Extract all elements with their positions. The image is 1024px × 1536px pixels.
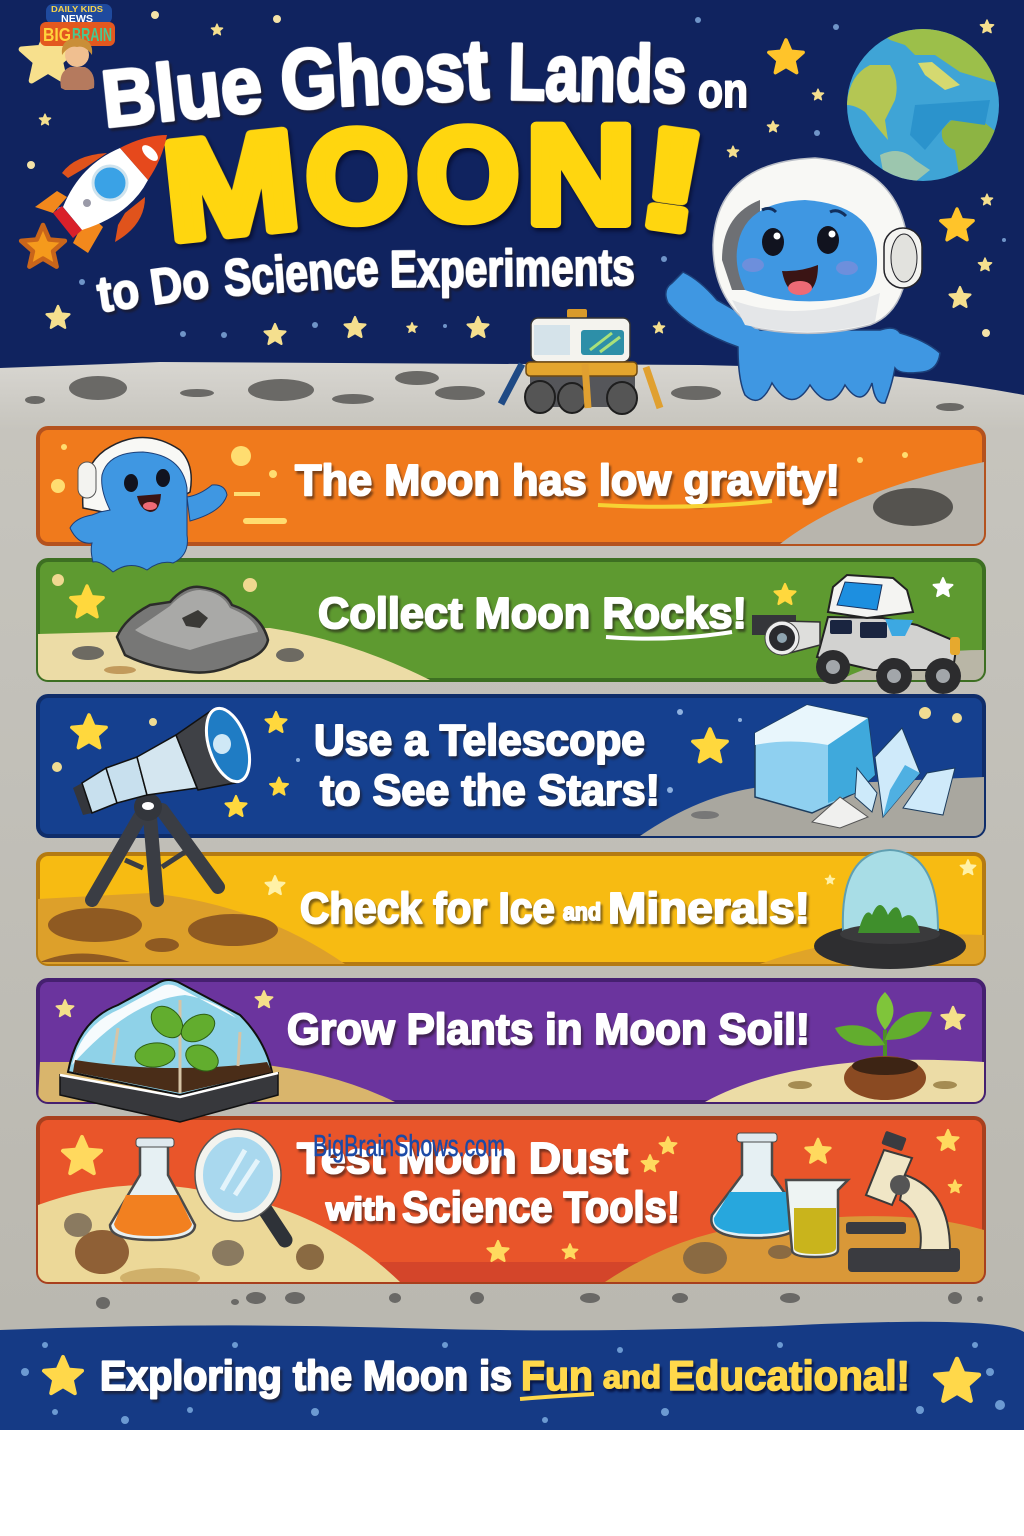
- title line 1: Lands: [508, 27, 687, 119]
- heading: moon dust line 2: with: [325, 1191, 396, 1227]
- moon ground: [0, 362, 1024, 1335]
- icon: mini ghost: [70, 438, 227, 572]
- icon: sprout in pot: [835, 992, 932, 1100]
- icon: glass dome with plants: [814, 850, 966, 969]
- icon: beaker: [786, 1180, 848, 1257]
- footer text: Educational!: [668, 1352, 910, 1399]
- title line 3: [94, 239, 635, 323]
- helmet: [713, 158, 908, 333]
- icon: ice block: [755, 705, 955, 828]
- icon: blue ghost astronaut: [666, 158, 940, 403]
- title line 2: MOON!: O: [417, 101, 519, 247]
- heading: ice and minerals: [300, 884, 810, 933]
- title line 2: MOON!: N: [526, 96, 636, 253]
- title line 2: MOON!: [156, 96, 716, 270]
- logo: Daily Kids News Big Brain: DAILY KIDS: [51, 5, 104, 14]
- underline: [598, 501, 772, 507]
- ghost body: [666, 272, 940, 403]
- icon: left star: [44, 1357, 82, 1393]
- logo: Daily Kids News Big Brain: BRAIN: [72, 25, 112, 45]
- heading: collect rocks: Collect Moon Rocks!: [318, 589, 747, 638]
- icon: right star: [935, 1359, 979, 1401]
- footer text: and: [603, 1359, 661, 1395]
- icon: blue flask: [711, 1133, 800, 1238]
- title line 3: Science: [222, 239, 380, 308]
- panel: grow plants: [38, 980, 984, 1102]
- footer text: Exploring the Moon is: [100, 1352, 512, 1399]
- icon: rocket: [21, 135, 167, 267]
- footer text: Fun: [521, 1352, 593, 1399]
- icon: microscope: [846, 1131, 960, 1272]
- title line 1: Blue: [97, 39, 266, 144]
- heading: ice and minerals: Minerals!: [608, 884, 810, 933]
- footer banner: [0, 1322, 1024, 1430]
- earth: [847, 20, 1000, 182]
- icon: magnifying glass: [195, 1129, 285, 1240]
- panel: telescope: [38, 696, 984, 836]
- logo: Daily Kids News Big Brain: [21, 4, 115, 90]
- heading: moon dust line 1: Test Moon Dust: [297, 1134, 628, 1183]
- title line 1: Ghost: [278, 22, 491, 127]
- heading: moon dust line 2: Science Tools!: [402, 1183, 680, 1232]
- panel: moon dust: [38, 1118, 984, 1288]
- logo: Daily Kids News Big Brain: BIG: [43, 25, 71, 45]
- title line 1: [97, 22, 748, 144]
- heading: ice and minerals: Check for Ice: [300, 884, 555, 933]
- icon: moon rock: [117, 587, 268, 673]
- panel: ice and minerals: [38, 850, 984, 969]
- underline: [606, 632, 732, 639]
- title line 1: on: [698, 65, 748, 118]
- background: starry sky: [0, 0, 1024, 430]
- panel: low gravity: [38, 428, 984, 544]
- logo: Daily Kids News Big Brain: NEWS: [61, 14, 93, 25]
- face: [737, 200, 877, 301]
- icon: telescope: [73, 703, 258, 900]
- heading: telescope line 1: Use a Telescope: [314, 716, 645, 765]
- title: [94, 22, 748, 323]
- title line 2: MOON!: M: [156, 100, 306, 270]
- heading: ice and minerals: and: [563, 899, 601, 926]
- title line 2: MOON!: !: [629, 97, 716, 262]
- icon: rover with camera: [752, 575, 961, 694]
- icon: greenhouse dome: [60, 980, 278, 1122]
- heading: low gravity: The Moon has low gravity!: [295, 456, 840, 505]
- title line 2: MOON!: O: [306, 103, 408, 249]
- title line 3: to Do: [94, 252, 212, 323]
- icon: lunar rover: [501, 309, 660, 414]
- icon: orange flask: [110, 1138, 195, 1240]
- heading: grow plants: Grow Plants in Moon Soil!: [287, 1005, 810, 1054]
- heading: telescope line 2: to See the Stars!: [320, 766, 660, 815]
- title line 3: Experiments: [390, 239, 635, 299]
- watermark: BigBrainShows.com: [313, 1128, 505, 1163]
- footer text: [100, 1352, 910, 1399]
- panel: collect rocks: [38, 560, 984, 694]
